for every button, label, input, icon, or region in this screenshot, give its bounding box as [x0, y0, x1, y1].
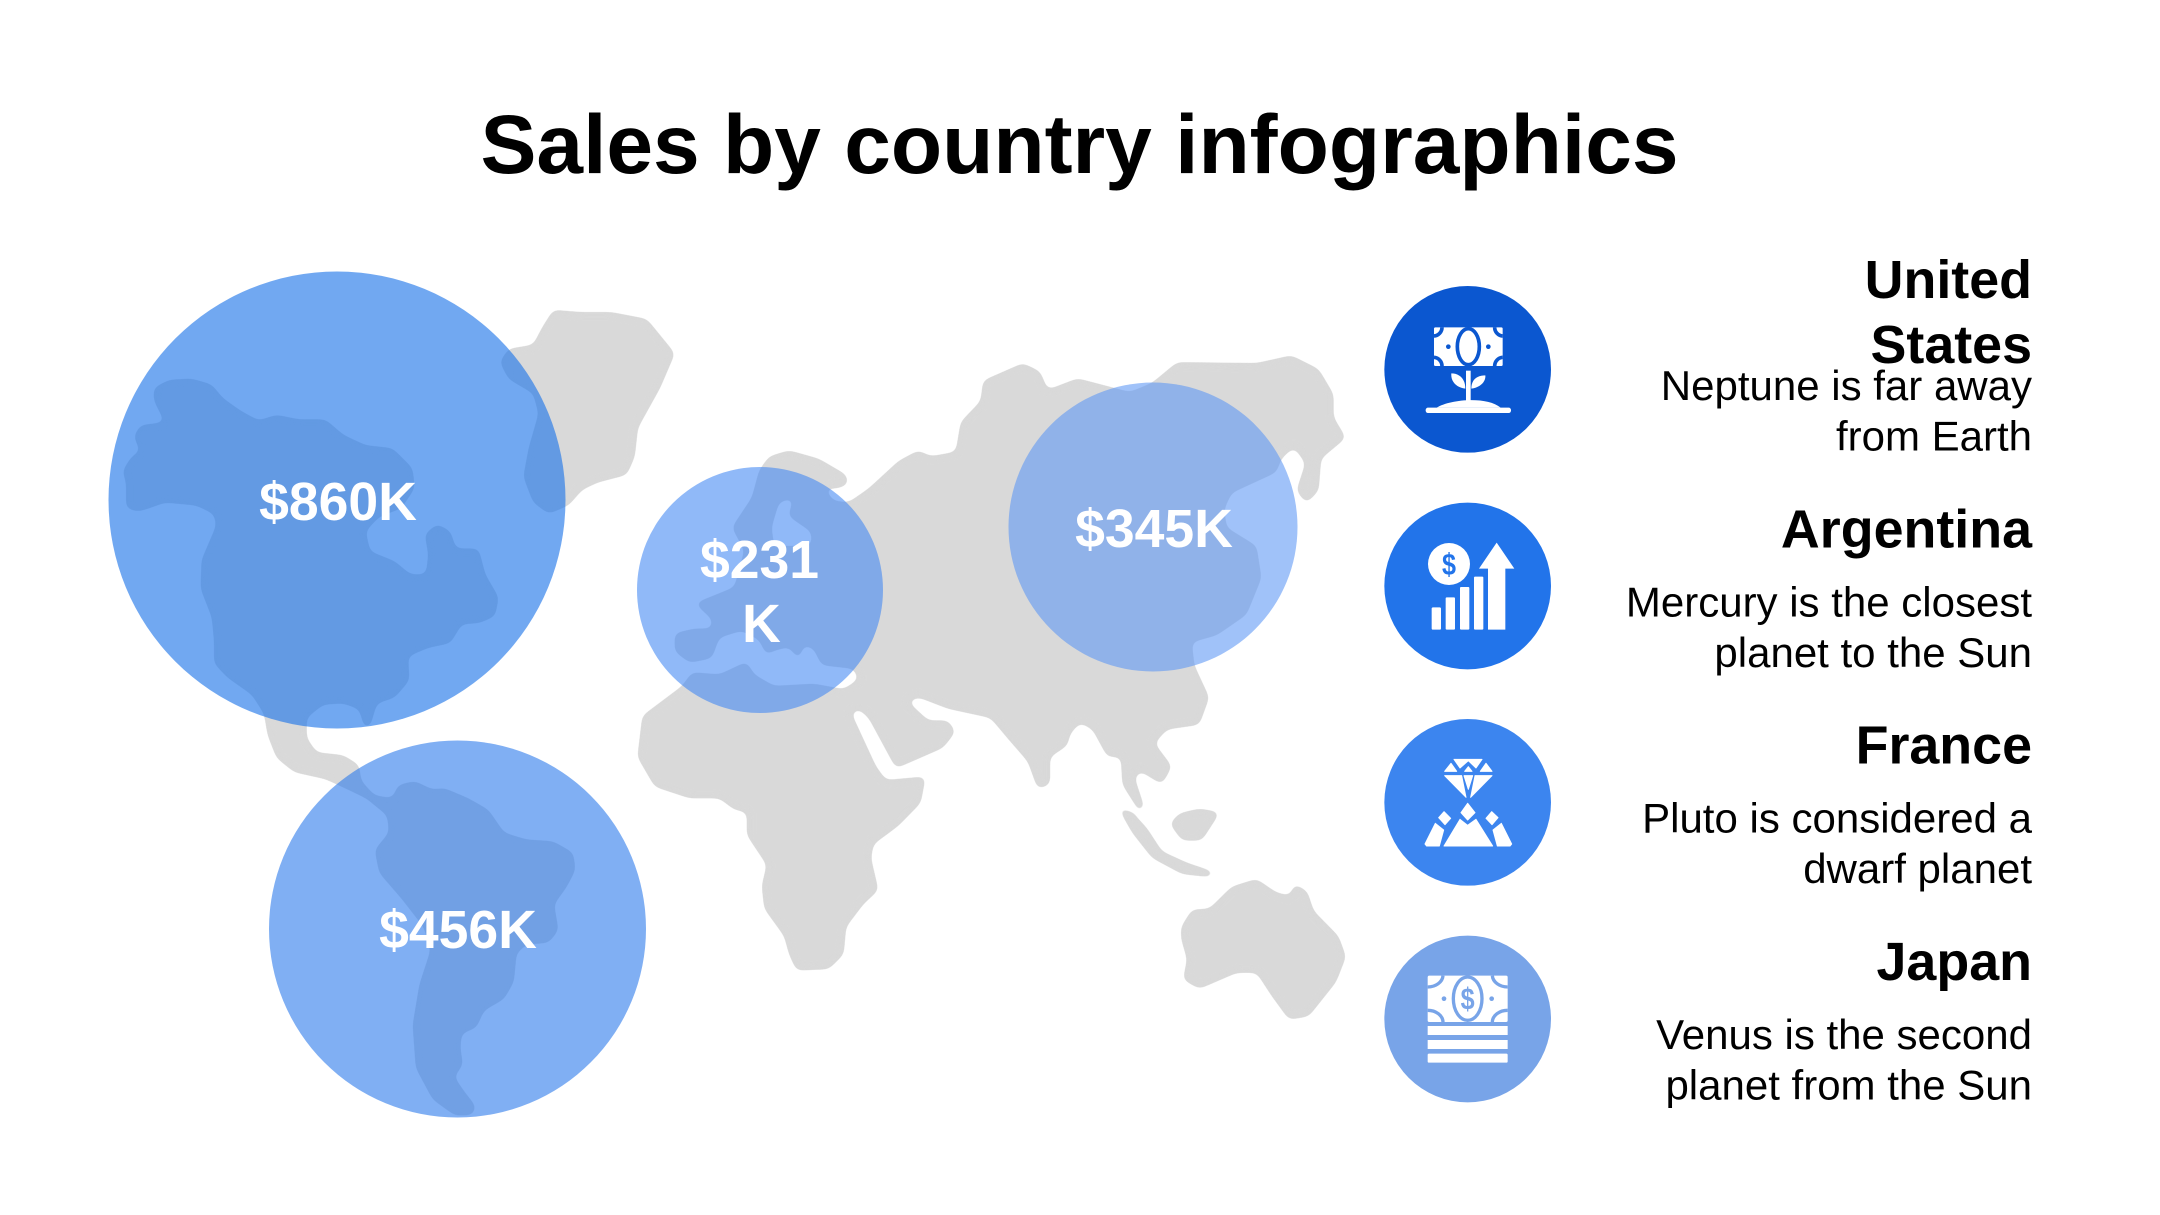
text: Japan: Japan [1877, 932, 2032, 992]
text: United States: States [1871, 315, 2032, 375]
map: Greenland [500, 310, 675, 514]
bubble: Japan: $345K [1075, 500, 1233, 559]
bubble: France: $231 [700, 531, 819, 590]
text: France: France [1856, 716, 2032, 776]
text: France: Pluto is considered a [1642, 794, 2033, 842]
text: United States: United [1865, 250, 2032, 310]
icon: money stack [1384, 936, 1551, 1102]
text: Argentina: Argentina [1781, 500, 2033, 560]
bubble: United States: $860K [259, 473, 417, 532]
text: United States: Neptune is far away [1661, 362, 2032, 409]
bubble: France [637, 467, 883, 713]
icon: diamond mountain [1384, 719, 1551, 886]
map: Americas [122, 379, 576, 1116]
map: Sumatra and Java [1117, 807, 1215, 877]
text: Japan: Venus is the second [1656, 1011, 2032, 1058]
icon: money plant [1384, 286, 1551, 453]
text: United States: from Earth [1836, 412, 2032, 460]
bubble: Japan [1008, 382, 1298, 672]
text: France [1642, 716, 2033, 892]
text: United States [1661, 250, 2032, 460]
bubble: France: K [742, 595, 781, 654]
bubble: Argentina: $456K [379, 901, 537, 960]
title: Sales by country infographics [480, 97, 1679, 191]
text: Japan: planet from the Sun [1665, 1062, 2032, 1108]
text: Japan [1656, 932, 2032, 1108]
text: Argentina: Mercury is the closest [1626, 578, 2032, 626]
bubble: Argentina [269, 740, 646, 1118]
map: Borneo [1170, 808, 1220, 841]
map: Eurasia and Africa [637, 355, 1346, 971]
text: Argentina: planet to the Sun [1714, 629, 2032, 676]
icon: growth chart [1384, 503, 1551, 669]
text: France: dwarf planet [1803, 845, 2032, 892]
icon: money stack: $ [1461, 982, 1475, 1016]
world map [122, 310, 1346, 1116]
text: Argentina [1626, 500, 2033, 676]
map: Australia [1181, 879, 1346, 1020]
icon: growth chart: $ [1442, 547, 1456, 581]
bubble: United States [108, 272, 566, 728]
